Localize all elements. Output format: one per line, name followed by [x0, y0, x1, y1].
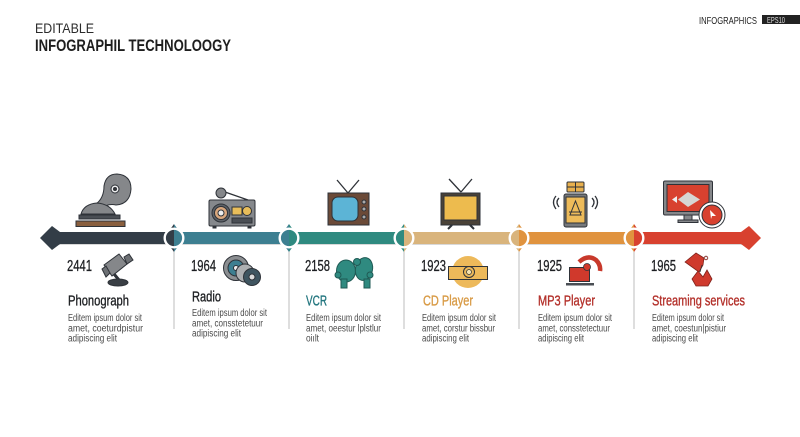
- text block: VCR description: amet, oeestur lplstlur: [306, 324, 382, 334]
- text block: Phonograph description: amet, coeturdpistur: [68, 324, 144, 334]
- text block: VCR description: oiılt: [306, 334, 319, 344]
- icon: discs: [224, 256, 260, 286]
- icon: monitor with play button: [664, 181, 725, 228]
- panel: Phonograph: [67, 174, 144, 344]
- text block: MP3 Player description: Editem ipsum dolor sit: [538, 313, 612, 324]
- text block: CD Player description: amet, corstur bissbur: [422, 324, 496, 334]
- title: Streaming services: Streaming services: [652, 292, 745, 310]
- title: Phonograph: Phonograph: [68, 292, 129, 310]
- text block: MP3 Player description: amet, consstetectuur: [538, 324, 611, 334]
- icon: laptop with signal arc: [566, 257, 600, 286]
- text block: Phonograph description: [68, 313, 144, 344]
- icon: yellow screen television: [441, 179, 480, 229]
- text block: Radio description: Editem ipsum dolor sit: [192, 308, 267, 319]
- panel: Radio: [191, 188, 267, 340]
- panel: Streaming services: [651, 181, 745, 344]
- text block: Radio description: amet, consstetetuur: [192, 318, 264, 330]
- title: MP3 Player: MP3 Player: [538, 292, 595, 310]
- text block: MP3 Player description: adipiscing elit: [538, 334, 584, 344]
- icon: teal gloves: [335, 256, 375, 288]
- panel: MP3 Player: [537, 182, 612, 344]
- title: CD Player: CD Player: [423, 292, 473, 310]
- badge: infographics EPS10: INFOGRAPHICS: [699, 15, 757, 27]
- text block: Phonograph description: adipiscing elit: [68, 334, 117, 344]
- icon: camera on mount: [102, 254, 133, 286]
- title: Radio: Radio: [192, 288, 221, 306]
- text block: CD Player description: [422, 313, 496, 344]
- year: 1965: 1965: [651, 258, 676, 275]
- year: 2441: 2441: [67, 258, 92, 275]
- year: 1923: 1923: [421, 258, 446, 275]
- text block: Streaming services description: Editem ipsum dolor sit: [652, 313, 724, 324]
- text block: MP3 Player description: [538, 313, 612, 344]
- year: 2158: 2158: [305, 258, 330, 275]
- timeline bar: [40, 224, 761, 329]
- year: 1964: 1964: [191, 258, 216, 275]
- badge: infographics EPS10: EPS10: [767, 16, 785, 25]
- text block: CD Player description: adipiscing elit: [422, 334, 469, 344]
- text block: VCR description: [306, 313, 382, 344]
- heading: title block: [35, 20, 232, 55]
- text block: Radio description: adipiscing elit: [192, 328, 241, 340]
- panel: CD Player: [421, 179, 496, 344]
- icon: projector: [448, 256, 488, 288]
- text block: VCR description: Editem ipsum dolor sit: [306, 313, 381, 324]
- icon: phonograph: [76, 174, 131, 226]
- text block: Radio description: [192, 308, 267, 340]
- panel: VCR: [305, 180, 382, 344]
- title: VCR: VCR: [306, 292, 327, 310]
- text block: Streaming services description: adipiscing elit: [652, 334, 698, 344]
- heading: title block: EDITABLE: [35, 20, 94, 36]
- icon: radio: [209, 188, 255, 228]
- heading: title block: INFOGRAPHIL TECHNOLOOGY: [35, 36, 232, 55]
- text block: Streaming services description: [652, 313, 727, 344]
- year: 1925: 1925: [537, 258, 562, 275]
- icon: phone with sound waves: [554, 182, 598, 227]
- icon: blue screen television: [328, 180, 369, 225]
- icon: red hat and hand: [685, 253, 712, 286]
- text block: Streaming services description: amet, coestun|pistiur: [652, 324, 727, 334]
- text block: CD Player description: Editem ipsum dolor sit: [422, 313, 496, 324]
- text block: Phonograph description: Editem ipsum dolor sit: [68, 313, 142, 324]
